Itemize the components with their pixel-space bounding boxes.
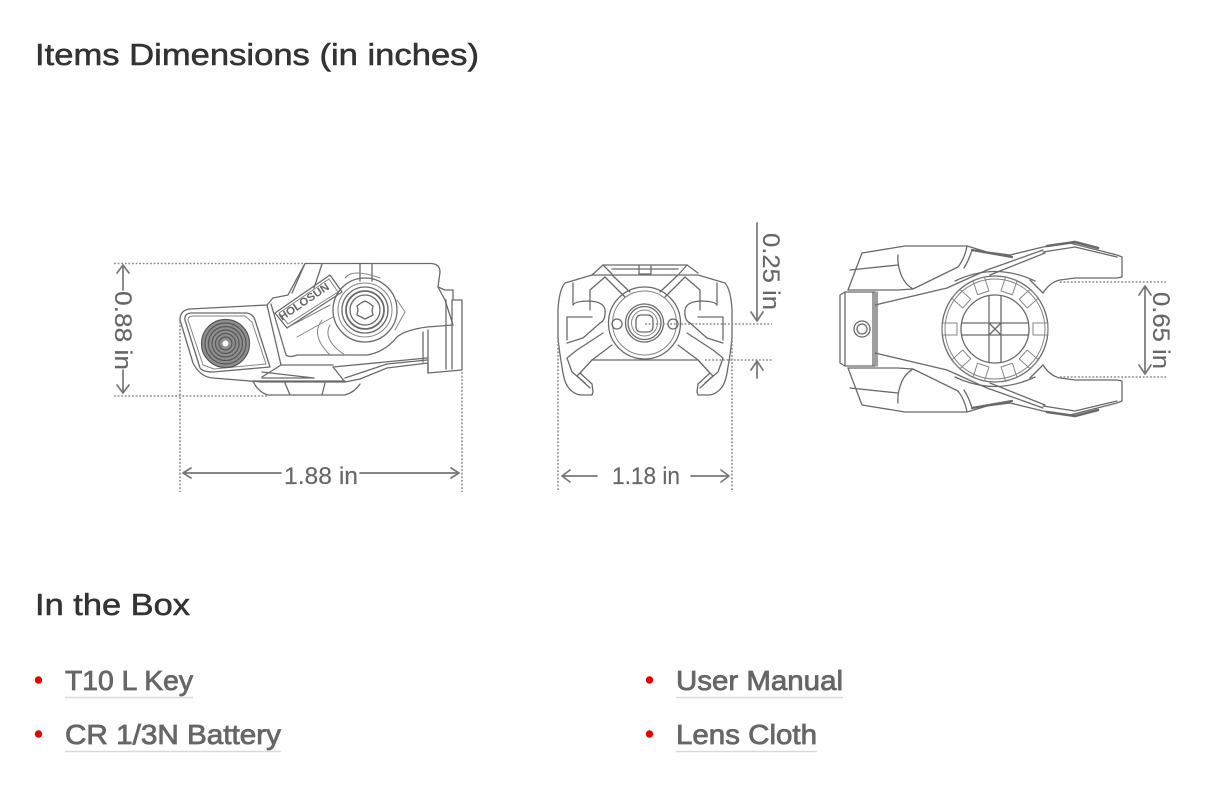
dimension: width 1.18 in: 1.18 in: [612, 463, 680, 490]
rear block: [840, 292, 875, 366]
turret dial: [942, 276, 1048, 382]
device: side view: HOLOSUN: [277, 281, 332, 323]
lower half mirrored: [848, 353, 1122, 416]
device: side view: [180, 264, 462, 395]
device: top view: [840, 242, 1122, 416]
diagram: top view with dimensions: [840, 242, 1174, 416]
dimension: height 0.88 in: 0.88 in: [109, 291, 136, 370]
dimension: height 0.88 in: [109, 264, 305, 396]
knob: [333, 278, 397, 342]
upper half: [848, 242, 1122, 305]
dimension: width 1.88 in: [180, 318, 462, 492]
diagram: front view with dimensions: [558, 223, 784, 492]
dimension: width 1.88 in: 1.88 in: [284, 463, 358, 490]
logo plate: [275, 275, 342, 328]
dimension: 0.25 in: [645, 223, 784, 378]
dimension: 0.65 in: 0.65 in: [1147, 292, 1174, 369]
dimension: width 1.18 in: [558, 337, 732, 492]
diagram: side view with dimensions: [109, 264, 462, 492]
list item: T10 L Key: T10 L Key: [65, 665, 193, 696]
right half mirrored: [660, 275, 732, 395]
left half: [558, 275, 630, 395]
title: items dimensions: Items Dimensions (in inches): [35, 37, 479, 72]
device: front view: [558, 265, 732, 395]
dimension: 0.65 in: [1060, 282, 1174, 377]
lens: [202, 320, 250, 368]
dimension: 0.25 in: 0.25 in: [757, 233, 784, 310]
list item: Lens Cloth: Lens Cloth: [676, 719, 817, 750]
list item: CR 1/3N Battery: CR 1/3N Battery: [65, 719, 281, 750]
heading: in the box: In the Box: [35, 587, 191, 622]
list item: User Manual: User Manual: [676, 665, 843, 696]
